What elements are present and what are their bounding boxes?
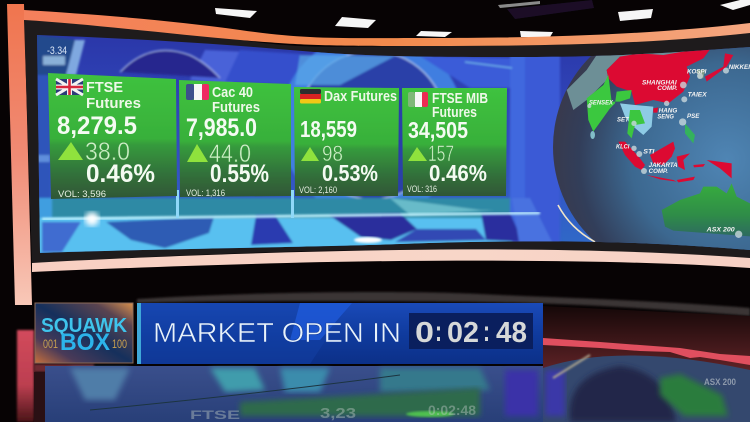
card: Dax Futures: 98 bbox=[322, 141, 343, 166]
logo: Squawk Box: SQUAWK bbox=[41, 315, 128, 337]
floor reflection of globe bbox=[543, 355, 750, 422]
floor reflection of screen: 3,23 bbox=[320, 405, 356, 422]
countdown timer bbox=[409, 313, 533, 349]
floor reflection of screen: 0:02:48 bbox=[428, 402, 476, 418]
index labels: HANG bbox=[659, 109, 678, 115]
card: Cac 40 Futures: 0.55% bbox=[210, 160, 269, 188]
icon: up triangle bbox=[58, 142, 83, 160]
index change label: -3.34 bbox=[47, 45, 67, 57]
logo: Squawk Box: 100 bbox=[112, 337, 127, 351]
logo: Squawk Box bbox=[35, 303, 133, 363]
card: FTSE MIB Futures bbox=[402, 88, 507, 196]
icon: Italy flag bbox=[408, 92, 428, 107]
index labels: STI bbox=[643, 150, 655, 156]
index markers bbox=[587, 68, 742, 238]
land: Japan bbox=[705, 53, 733, 82]
index labels bbox=[589, 65, 750, 233]
globe map bbox=[553, 47, 750, 250]
card: FTSE Futures: 38.0 bbox=[85, 138, 130, 166]
card: FTSE Futures: 8,279.5 bbox=[57, 112, 137, 140]
index labels: COMP. bbox=[649, 169, 668, 175]
studio floor bbox=[17, 292, 750, 422]
card: Cac 40 Futures: Cac 40 bbox=[212, 84, 253, 101]
light flare bbox=[42, 190, 540, 243]
icon: Germany flag bbox=[300, 89, 321, 104]
card: Dax Futures: Dax Futures bbox=[324, 88, 397, 105]
index labels: PSE bbox=[687, 114, 700, 120]
card: FTSE Futures: FTSE bbox=[86, 79, 123, 96]
land: Philippines bbox=[685, 123, 695, 143]
card: Dax Futures: 18,559 bbox=[300, 116, 357, 142]
floor reflection of screen: FTSE bbox=[190, 408, 240, 422]
index labels: KOSPI bbox=[687, 70, 707, 76]
card: FTSE MIB Futures: VOL: 316 bbox=[407, 184, 437, 195]
index labels: NIKKEI bbox=[729, 65, 750, 71]
index labels: ASX 200 bbox=[705, 227, 735, 233]
top orange band bbox=[24, 10, 750, 46]
index labels: SENSEX bbox=[589, 101, 614, 107]
video wall screen bbox=[37, 35, 750, 253]
index labels: SHANGHAI bbox=[642, 80, 677, 86]
floor reflection of globe: ASX 200 bbox=[704, 377, 736, 387]
countdown timer: 0 bbox=[415, 317, 434, 349]
card: Dax Futures: 0.53% bbox=[322, 160, 378, 186]
icon: UK flag bbox=[56, 79, 83, 95]
index labels: KLCI bbox=[616, 145, 630, 151]
card: FTSE MIB Futures: 157 bbox=[428, 141, 454, 166]
icon: up triangle bbox=[301, 147, 319, 161]
icon: up triangle bbox=[187, 144, 208, 162]
countdown timer: 02 bbox=[447, 317, 479, 349]
index labels: SET bbox=[617, 117, 630, 123]
card: FTSE MIB Futures: 34,505 bbox=[408, 117, 468, 143]
countdown timer: 48 bbox=[496, 317, 527, 349]
card: FTSE MIB Futures: 0.46% bbox=[429, 160, 487, 186]
land: Australia bbox=[662, 183, 750, 237]
index labels: SENG bbox=[657, 115, 674, 121]
card: Cac 40 Futures bbox=[179, 80, 291, 199]
card: FTSE MIB Futures: FTSE MIB bbox=[432, 90, 488, 107]
card: Dax Futures: VOL: 2,160 bbox=[299, 185, 337, 196]
index labels: COMP. bbox=[657, 86, 678, 92]
card: Cac 40 Futures: 7,985.0 bbox=[186, 114, 257, 142]
card: FTSE MIB Futures: Futures bbox=[432, 104, 477, 121]
card: Cac 40 Futures: Futures bbox=[212, 99, 260, 116]
card: FTSE Futures: VOL: 3,596 bbox=[58, 189, 106, 200]
countdown timer: : bbox=[435, 316, 442, 348]
index labels: TAIEX bbox=[688, 92, 708, 98]
card: Cac 40 Futures: VOL: 1,316 bbox=[186, 188, 225, 199]
card: FTSE Futures bbox=[48, 73, 177, 200]
card: FTSE Futures: Futures bbox=[86, 95, 141, 112]
land: India bbox=[587, 75, 632, 132]
left pillar bbox=[7, 4, 32, 305]
land: Indonesia bbox=[618, 107, 732, 182]
floor reflection of screen bbox=[45, 366, 543, 422]
logo: Squawk Box: BOX bbox=[60, 329, 110, 356]
background graphics bbox=[37, 33, 560, 253]
land: Sri Lanka bbox=[590, 131, 595, 139]
lower screen band bbox=[32, 249, 750, 272]
land: China bbox=[607, 49, 710, 105]
logo: Squawk Box: 001 bbox=[43, 337, 58, 351]
icon: up triangle bbox=[408, 147, 427, 161]
pink floor streak bbox=[543, 338, 750, 365]
countdown timer: : bbox=[483, 316, 490, 348]
card: Cac 40 Futures: 44.0 bbox=[209, 140, 251, 168]
card: Dax Futures bbox=[294, 87, 399, 196]
land: Thailand bbox=[627, 110, 645, 138]
index labels: JAKARTA bbox=[649, 163, 678, 169]
screen bezel bbox=[24, 20, 750, 263]
banner: market open countdown bbox=[137, 303, 543, 364]
grey land bbox=[567, 50, 690, 110]
icon: France flag bbox=[186, 84, 209, 100]
card: FTSE Futures: 0.46% bbox=[86, 160, 155, 188]
banner: market open countdown: MARKET OPEN IN bbox=[153, 317, 401, 348]
land: Korea bbox=[697, 70, 705, 78]
ceiling lights bbox=[215, 0, 750, 37]
land: Southeast Asia bbox=[620, 103, 653, 135]
